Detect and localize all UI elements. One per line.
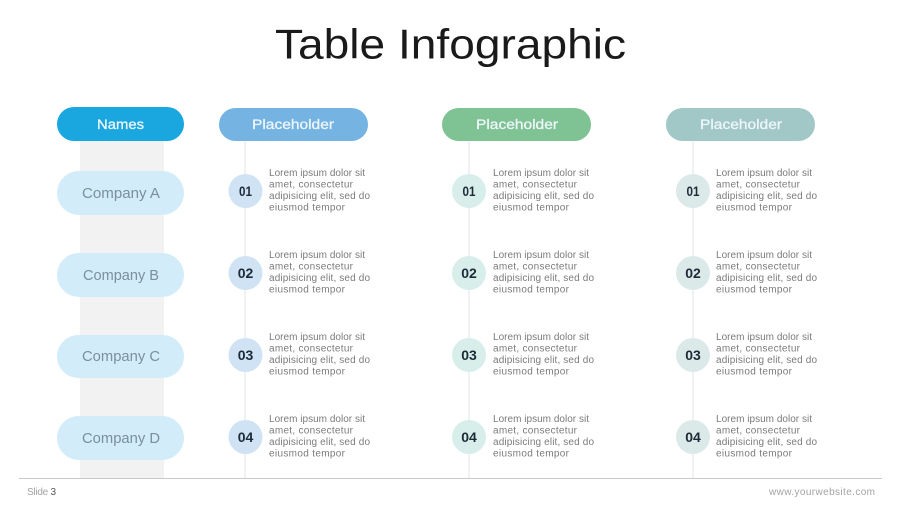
column 3 timeline line xyxy=(692,141,694,478)
column 3 row 2: amet, consectetur xyxy=(716,262,801,272)
row label: Company A xyxy=(57,171,184,215)
column 2 row 2: 02 xyxy=(461,265,477,281)
column 2 row 3: eiusmod tempor xyxy=(493,366,570,378)
column 1 row 2: 02 xyxy=(238,265,253,281)
column 1 row 1: amet, consectetur xyxy=(269,180,354,190)
column 3 row 3 xyxy=(676,332,817,378)
column 3 row 2: eiusmod tempor xyxy=(716,284,793,296)
column 2 row 2: eiusmod tempor xyxy=(493,284,570,296)
column 2 row 3 xyxy=(452,332,594,378)
column 1 timeline line xyxy=(244,141,246,478)
column 3 row 4: eiusmod tempor xyxy=(716,448,793,460)
column 2 row 1 xyxy=(452,168,594,214)
column 2 row 2: amet, consectetur xyxy=(493,262,578,272)
column 2 row 4: 04 xyxy=(461,429,477,445)
column 3 row 3: amet, consectetur xyxy=(716,344,801,354)
column 3 row 4: 04 xyxy=(685,429,701,445)
column 2 row 4: amet, consectetur xyxy=(493,426,578,436)
column 1 row 4: amet, consectetur xyxy=(269,426,354,436)
column 2 row 4 xyxy=(452,414,594,460)
header: Names: Names xyxy=(97,116,144,132)
column 1 row 3 xyxy=(228,332,370,378)
column 2 row 4: Lorem ipsum dolor sit xyxy=(493,414,589,425)
column 2 row 2: adipisicing elit, sed do xyxy=(493,273,594,284)
column 1 row 2: amet, consectetur xyxy=(269,262,354,272)
column 1 row 1: 01 xyxy=(239,183,252,199)
header: Placeholder 3 xyxy=(666,108,815,141)
footer: website: www.yourwebsite.com xyxy=(768,487,875,498)
header: Names xyxy=(57,107,184,141)
column 1 row 3: eiusmod tempor xyxy=(269,366,346,378)
header: Placeholder 1: Placeholder xyxy=(252,116,334,132)
column 1 row 2: eiusmod tempor xyxy=(269,284,346,296)
column 3 row 4: adipisicing elit, sed do xyxy=(716,437,817,448)
column 3 row 3: eiusmod tempor xyxy=(716,366,793,378)
column 1 row 4: Lorem ipsum dolor sit xyxy=(269,414,365,425)
column 2 row 1: adipisicing elit, sed do xyxy=(493,191,594,202)
column 1 row 4 xyxy=(228,414,370,460)
column 1 row 3: amet, consectetur xyxy=(269,344,354,354)
column 3 row 1: Lorem ipsum dolor sit xyxy=(716,168,812,179)
column 2 row 3: Lorem ipsum dolor sit xyxy=(493,332,589,343)
column 1 row 2 xyxy=(228,250,370,296)
header: Placeholder 3: Placeholder xyxy=(700,116,782,132)
header: Placeholder 1 xyxy=(219,108,368,141)
row label: Company A: Company A xyxy=(82,185,160,202)
column 3 row 1: eiusmod tempor xyxy=(716,202,793,214)
column 2 row 3: amet, consectetur xyxy=(493,344,578,354)
title: Table Infographic xyxy=(275,20,626,68)
column 2 row 4: adipisicing elit, sed do xyxy=(493,437,594,448)
column 1 row 1: Lorem ipsum dolor sit xyxy=(269,168,365,179)
column 2 row 4: eiusmod tempor xyxy=(493,448,570,460)
column 3 row 4: Lorem ipsum dolor sit xyxy=(716,414,812,425)
column 3 row 1: amet, consectetur xyxy=(716,180,801,190)
column 3 row 2: Lorem ipsum dolor sit xyxy=(716,250,812,261)
column 1 row 1 xyxy=(228,168,370,214)
row label: Company D xyxy=(57,416,184,460)
column 2 row 2 xyxy=(452,250,594,296)
column 3 row 1 xyxy=(676,168,817,214)
column 3 row 3: Lorem ipsum dolor sit xyxy=(716,332,812,343)
header: Placeholder 2 xyxy=(442,108,591,141)
column 2 row 3: 03 xyxy=(461,347,477,363)
column 1 row 4: 04 xyxy=(238,429,253,445)
column 2 row 2: Lorem ipsum dolor sit xyxy=(493,250,589,261)
column 1 row 3: adipisicing elit, sed do xyxy=(269,355,370,366)
footer rule xyxy=(19,478,882,479)
column 1 row 2: Lorem ipsum dolor sit xyxy=(269,250,365,261)
column 3 row 4 xyxy=(676,414,817,460)
header: Placeholder 2: Placeholder xyxy=(476,116,558,132)
column 3 row 3: adipisicing elit, sed do xyxy=(716,355,817,366)
column 2 timeline line xyxy=(468,141,470,478)
row label: Company B: Company B xyxy=(83,267,159,284)
column 3 row 3: 03 xyxy=(685,347,701,363)
column 2 row 1: 01 xyxy=(462,183,476,199)
column 1 row 4: eiusmod tempor xyxy=(269,448,346,460)
row label: Company C xyxy=(57,335,184,378)
row label: Company C: Company C xyxy=(82,348,160,365)
column 1 row 1: eiusmod tempor xyxy=(269,202,346,214)
names column background band xyxy=(80,141,164,478)
column 2 row 1: amet, consectetur xyxy=(493,180,578,190)
column 3 row 1: 01 xyxy=(686,183,700,199)
column 1 row 2: adipisicing elit, sed do xyxy=(269,273,370,284)
column 1 row 1: adipisicing elit, sed do xyxy=(269,191,370,202)
column 3 row 2: 02 xyxy=(685,265,701,281)
column 1 row 4: adipisicing elit, sed do xyxy=(269,437,370,448)
row label: Company D: Company D xyxy=(82,430,160,447)
column 2 row 1: Lorem ipsum dolor sit xyxy=(493,168,589,179)
column 3 row 1: adipisicing elit, sed do xyxy=(716,191,817,202)
column 1 row 3: Lorem ipsum dolor sit xyxy=(269,332,365,343)
column 3 row 2: adipisicing elit, sed do xyxy=(716,273,817,284)
column 1 row 3: 03 xyxy=(238,347,253,363)
column 2 row 1: eiusmod tempor xyxy=(493,202,570,214)
row label: Company B xyxy=(57,253,184,297)
column 3 row 2 xyxy=(676,250,817,296)
column 2 row 3: adipisicing elit, sed do xyxy=(493,355,594,366)
footer: slide number: Slide 3 xyxy=(27,487,56,498)
column 3 row 4: amet, consectetur xyxy=(716,426,801,436)
